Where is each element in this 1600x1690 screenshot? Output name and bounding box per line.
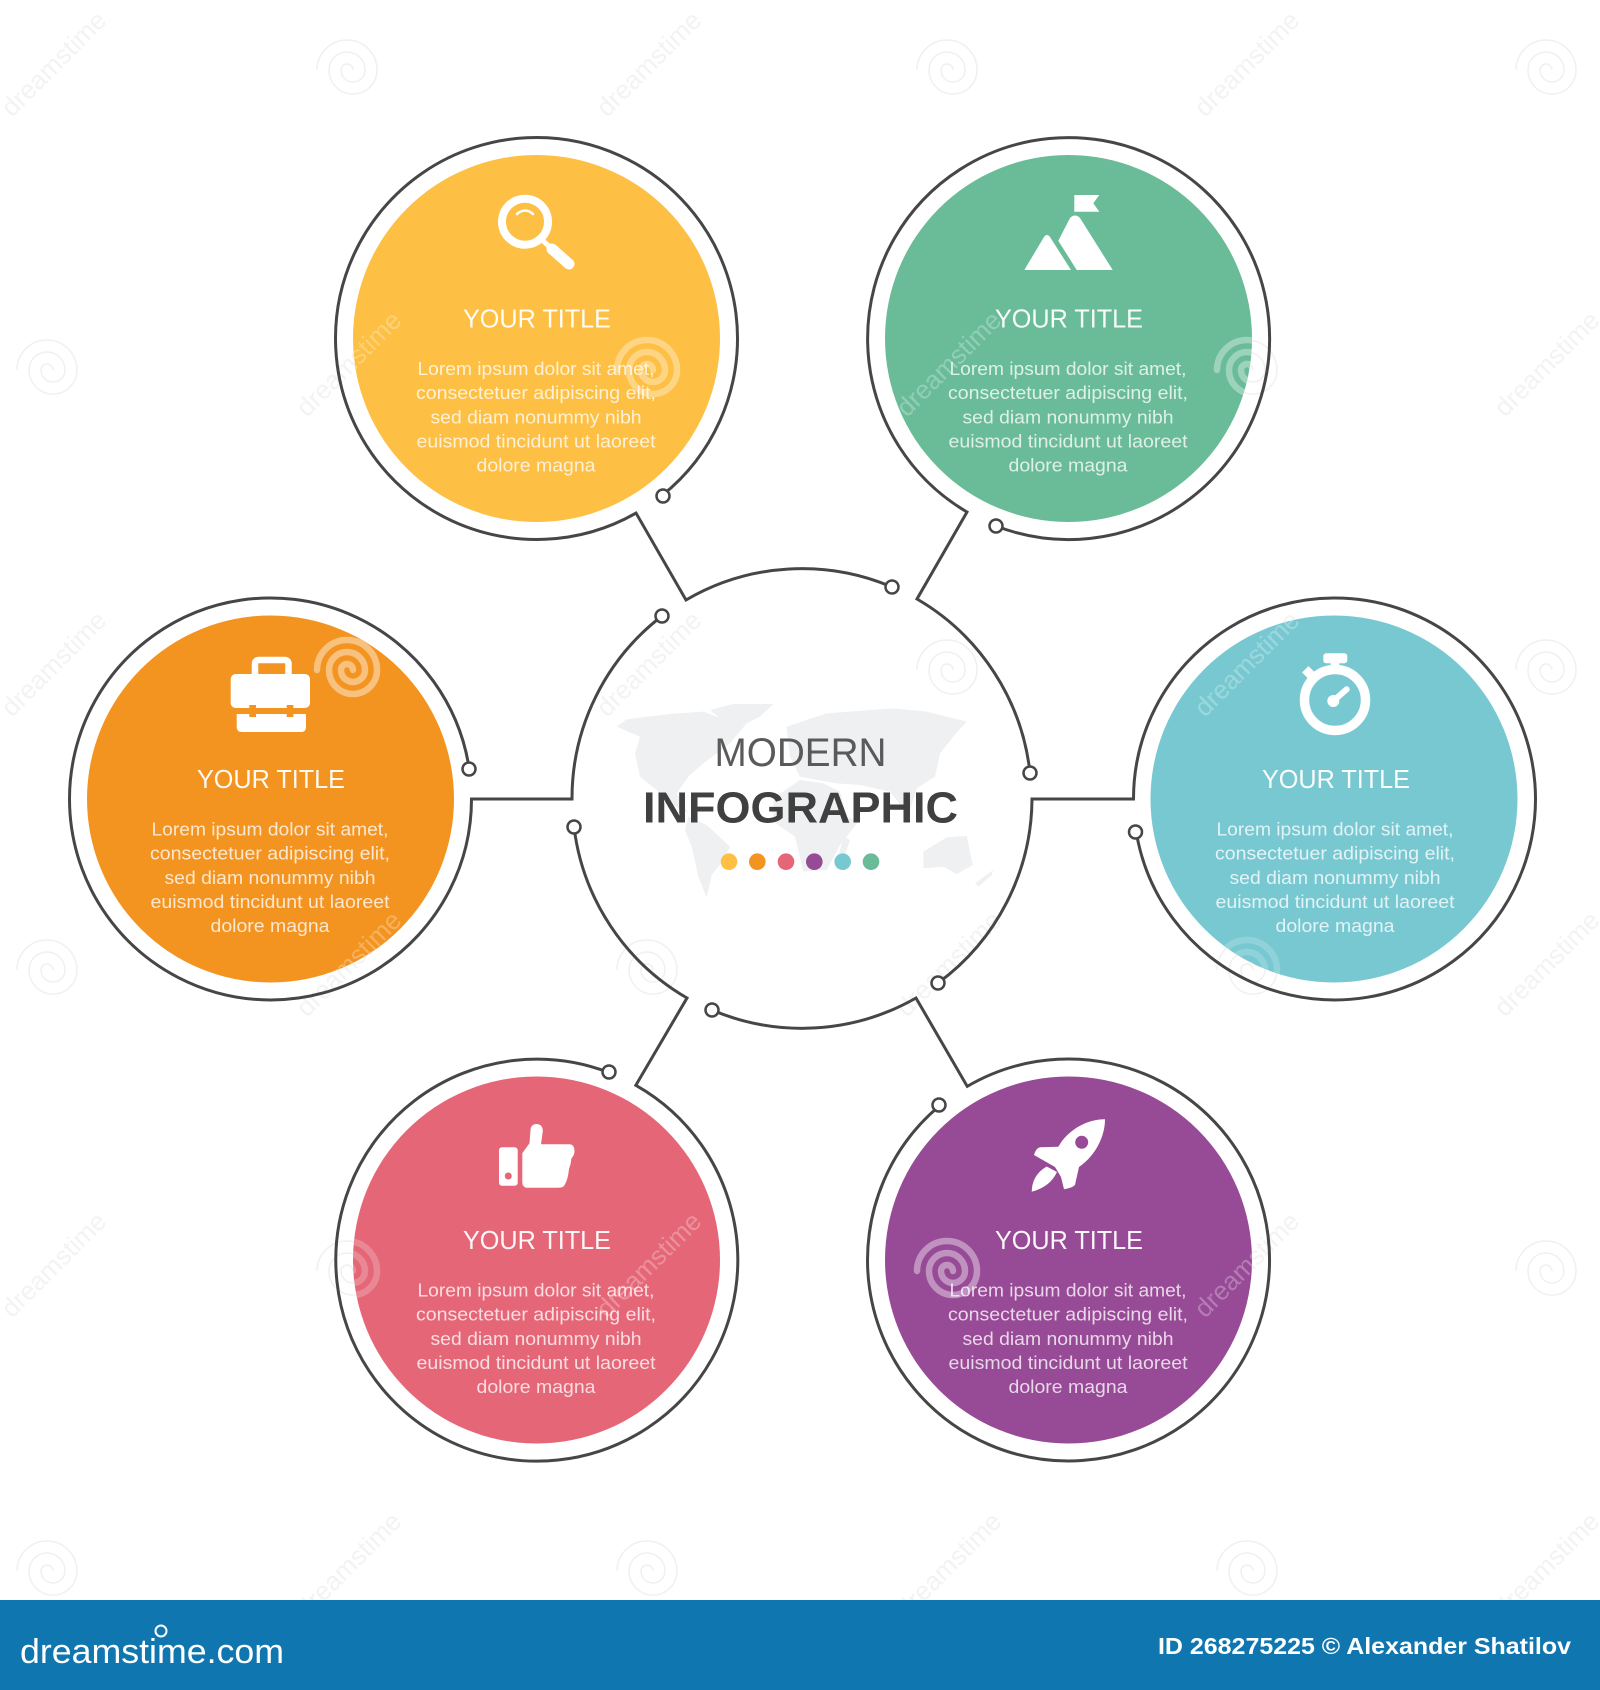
watermark pattern: dreamstime [890, 305, 1007, 422]
panel: green circle fill [885, 155, 1252, 522]
panel text: yellow: consectetuer adipiscing elit, [416, 382, 656, 403]
watermark pattern: dreamstime [290, 1506, 407, 1623]
panel text: blue: Lorem ipsum dolor sit amet, [1216, 818, 1454, 840]
panel: purple circle fill [885, 1076, 1252, 1444]
panel text: orange: YOUR TITLE [197, 764, 345, 794]
icon: briefcase [231, 660, 310, 732]
panel text: green: dolore magna [1008, 454, 1128, 476]
connector: green circle outline to centre [868, 138, 1270, 780]
panel text: yellow: sed diam nonummy nibh [430, 406, 642, 427]
panel text: yellow: Lorem ipsum dolor sit amet, [418, 358, 654, 379]
watermark pattern: dreamstime [590, 1206, 707, 1323]
panel text: yellow: YOUR TITLE [463, 304, 611, 334]
watermark pattern: dreamstime [890, 905, 1007, 1022]
panel text: yellow: dolore magna [476, 454, 596, 476]
panel text: green [948, 304, 1188, 476]
centre title: MODERN [714, 731, 886, 775]
panel: blue circle fill [1150, 616, 1518, 982]
watermark over coloured circles: dreamstime [890, 305, 1007, 422]
watermark pattern: dreamstime [590, 5, 707, 122]
footer credit: ID 268275225 © Alexander Shatilov [1158, 1633, 1571, 1659]
watermark over coloured circles [290, 305, 1305, 1323]
panel text: purple: consectetuer adipiscing elit, [948, 1304, 1188, 1325]
panel text: pink: dolore magna [476, 1376, 596, 1397]
panel text: green: sed diam nonummy nibh [962, 406, 1174, 427]
panel text: orange [150, 764, 390, 936]
panel text: pink: euismod tincidunt ut laoreet [416, 1352, 656, 1373]
centre title: INFOGRAPHIC [643, 784, 958, 832]
panel text: green: euismod tincidunt ut laoreet [948, 430, 1188, 451]
panel text: blue: euismod tincidunt ut laoreet [1216, 891, 1454, 912]
panel text: purple: Lorem ipsum dolor sit amet, [950, 1280, 1186, 1300]
panel text: pink: sed diam nonummy nibh [430, 1328, 642, 1349]
connector: orange circle outline to centre [70, 598, 669, 1000]
panel text: green: Lorem ipsum dolor sit amet, [950, 358, 1186, 379]
panel text: green: consectetuer adipiscing elit, [948, 382, 1188, 403]
icon: magnifying glass [502, 199, 569, 264]
panel text: pink: Lorem ipsum dolor sit amet, [418, 1280, 654, 1300]
footer logo: dreamstime.com [20, 1633, 284, 1671]
panel text: orange: euismod tincidunt ut laoreet [150, 891, 390, 912]
icon: mountain with flag [1024, 195, 1113, 270]
panel text: purple: YOUR TITLE [995, 1225, 1143, 1255]
panel text: purple [948, 1225, 1188, 1397]
connector: blue circle outline to centre [932, 598, 1536, 1000]
panel text: blue [1215, 764, 1455, 936]
panel: yellow circle fill [353, 155, 720, 522]
panel text: pink [416, 1225, 656, 1397]
panel text: blue: dolore magna [1276, 915, 1395, 936]
panel text: blue: YOUR TITLE [1262, 764, 1410, 794]
panel text: orange: consectetuer adipiscing elit, [150, 843, 390, 864]
icon: rocket [1032, 1119, 1105, 1192]
panel text: green: YOUR TITLE [995, 304, 1143, 334]
watermark pattern: dreamstime [590, 605, 707, 722]
world map [617, 704, 993, 897]
watermark pattern: dreamstime [290, 905, 407, 1022]
panel: pink circle fill [353, 1076, 720, 1444]
panel text: blue: sed diam nonummy nibh [1230, 867, 1440, 888]
panel text: purple: sed diam nonummy nibh [962, 1328, 1174, 1349]
footer bar [0, 1600, 1600, 1690]
watermark over coloured circles: dreamstime [290, 305, 407, 422]
watermark pattern: dreamstime [890, 1506, 1007, 1623]
panel: orange circle fill [87, 616, 454, 982]
watermark pattern: dreamstime [1188, 1206, 1305, 1323]
panel text: pink: YOUR TITLE [463, 1225, 611, 1255]
panel text: orange: Lorem ipsum dolor sit amet, [152, 818, 388, 840]
centre title [643, 731, 958, 832]
watermark over coloured circles: dreamstime [590, 1206, 707, 1323]
colour dots row [721, 853, 879, 870]
panel text: purple: dolore magna [1008, 1376, 1128, 1397]
watermark over coloured circles: dreamstime [1188, 605, 1305, 722]
watermark over coloured circles: dreamstime [1188, 1206, 1305, 1323]
watermark over coloured circles: dreamstime [290, 905, 407, 1022]
panel text: yellow [416, 304, 656, 476]
watermark pattern: dreamstime [290, 305, 407, 422]
panel text: pink: consectetuer adipiscing elit, [416, 1304, 656, 1325]
panel text: blue: consectetuer adipiscing elit, [1215, 843, 1455, 864]
icon: thumbs up [499, 1124, 574, 1188]
watermark pattern: dreamstime [1188, 5, 1305, 122]
connector: purple circle outline to centre [706, 998, 1270, 1461]
panel text: purple: euismod tincidunt ut laoreet [948, 1352, 1188, 1373]
panel text: yellow: euismod tincidunt ut laoreet [416, 430, 656, 451]
connector: yellow circle outline to centre [336, 137, 898, 600]
watermark pattern: dreamstime [1188, 605, 1305, 722]
panel text: orange: dolore magna [210, 915, 330, 936]
panel text: orange: sed diam nonummy nibh [164, 867, 376, 888]
icon: stopwatch [1302, 653, 1366, 730]
connector: pink circle outline to centre [336, 820, 738, 1461]
